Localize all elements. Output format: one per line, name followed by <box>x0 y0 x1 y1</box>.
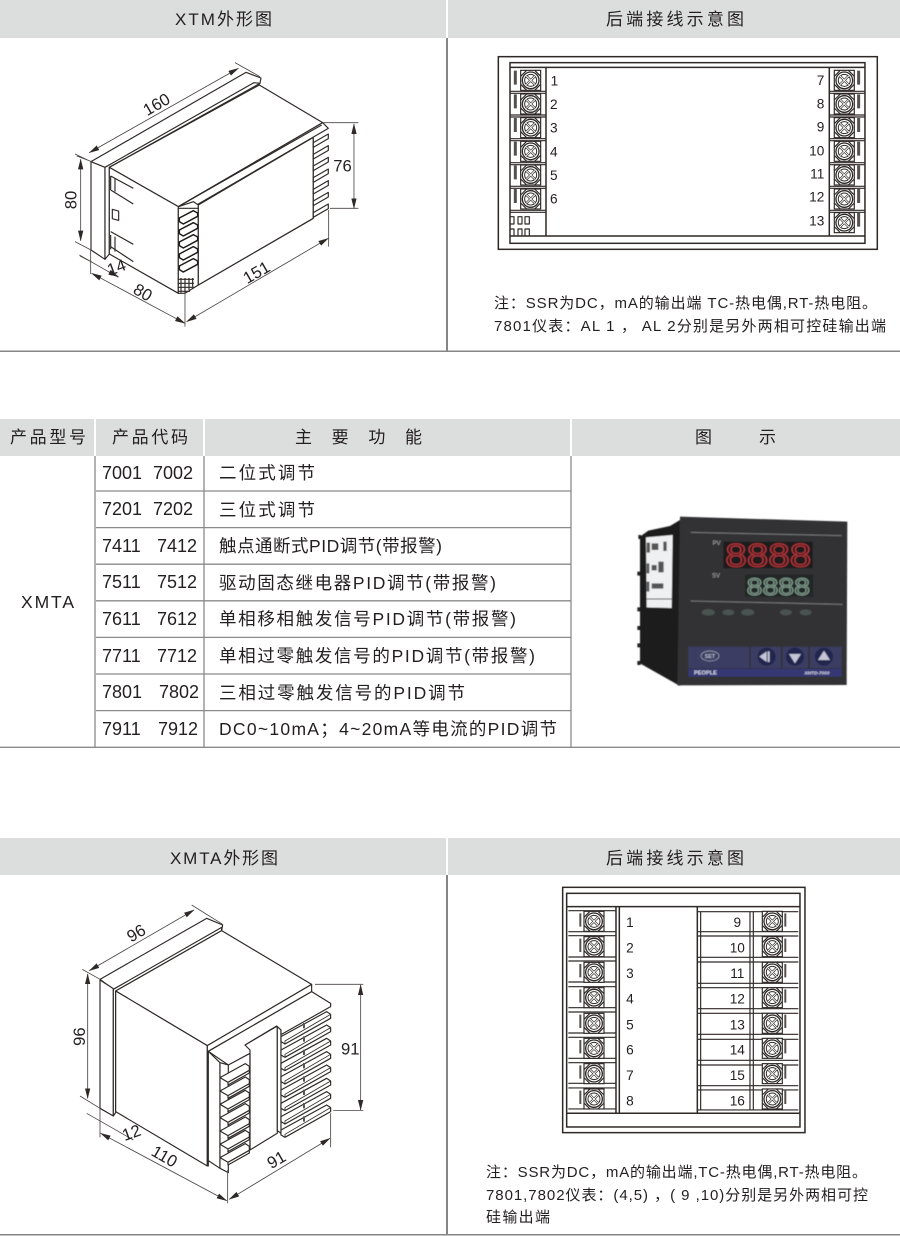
header bar: XMTA outline: XMTA外形图 <box>170 849 278 868</box>
table: product models <box>0 419 900 747</box>
product codes: 7801 <box>102 682 142 702</box>
product codes: 7002 <box>153 463 193 483</box>
functions: 驱动固态继电器PID调节(带报警) <box>219 573 496 593</box>
terminal numbers: 2 <box>550 97 558 112</box>
table header: 图 示 <box>695 428 776 447</box>
product codes: 7802 <box>159 682 199 702</box>
product codes: 7001 <box>102 463 142 483</box>
product codes: 7411 <box>102 536 141 556</box>
terminal numbers: 12 <box>809 190 824 205</box>
note: XTM wiring: 7801仪表：AL 1 ， AL 2分别是另外两相可控硅输出端 <box>494 318 886 335</box>
terminal numbers: 10 <box>809 143 825 158</box>
terminal numbers: 14 <box>730 1043 745 1058</box>
product codes: 7512 <box>157 572 197 592</box>
terminal numbers: 11 <box>810 166 824 181</box>
photo: XMTA controller: SET <box>705 654 716 660</box>
functions <box>219 463 557 739</box>
right terminal block <box>829 70 865 233</box>
functions: 单相移相触发信号PID调节(带报警) <box>219 609 516 629</box>
product codes: 7611 <box>102 609 141 629</box>
functions: 二位式调节 <box>219 463 315 483</box>
diagram: XTM rear terminals <box>498 57 877 249</box>
note: XMTA wiring <box>486 1164 868 1226</box>
note: XTM wiring <box>494 295 886 335</box>
photo: XMTA controller: 8888 <box>747 574 810 601</box>
product codes <box>102 463 199 739</box>
product codes: 7911 <box>102 719 141 739</box>
terminal numbers: 3 <box>550 120 558 135</box>
table header <box>0 419 900 456</box>
product codes: 7511 <box>102 572 141 592</box>
functions: 触点通断式PID调节(带报警) <box>219 536 442 556</box>
table: product models: XMTA <box>21 592 74 612</box>
header bar: XTM outline <box>0 0 446 38</box>
diagram: XMTA isometric outline with dimensions: 96 <box>70 1027 89 1046</box>
note: XMTA wiring: 注：SSR为DC，mA的输出端,TC-热电偶,RT-热电阻。 <box>486 1164 867 1181</box>
diagram: XTM isometric outline with dimensions <box>62 63 358 327</box>
table header: 产品型号 <box>10 428 86 447</box>
terminal numbers: 13 <box>730 1017 745 1032</box>
terminal numbers: 15 <box>730 1068 745 1083</box>
terminal numbers: 11 <box>730 966 744 981</box>
photo: XMTA controller: 8888 <box>725 537 811 573</box>
photo: XMTA controller: XMTD-7000 <box>803 670 830 675</box>
functions: DC0~10mA；4~20mA等电流的PID调节 <box>219 719 557 739</box>
terminal numbers: 9 <box>817 120 824 135</box>
product codes: 7712 <box>157 646 197 666</box>
diagram: XTM isometric outline with dimensions: 160 <box>140 89 173 120</box>
terminal numbers: 1 <box>551 74 558 89</box>
terminal numbers: 6 <box>626 1043 634 1058</box>
terminal numbers: 4 <box>626 992 634 1007</box>
diagram: XMTA isometric outline with dimensions: 12 <box>119 1121 143 1145</box>
terminal numbers: 8 <box>626 1093 634 1108</box>
note: XMTA wiring: 硅输出端 <box>486 1209 550 1226</box>
diagram: XTM isometric outline with dimensions: 76 <box>333 157 352 176</box>
table header: 主 要 功 能 <box>295 428 422 447</box>
terminal numbers: 12 <box>730 992 745 1007</box>
terminal numbers: 5 <box>550 168 558 183</box>
diagram: XTM isometric outline with dimensions: 14 <box>104 255 128 280</box>
terminal numbers: 8 <box>817 96 824 111</box>
terminal numbers: 10 <box>730 941 745 956</box>
note: XMTA wiring: 7801,7802仪表：(4,5) ，( 9 ,10)分别是另外两相可控 <box>486 1187 868 1204</box>
table header: 产品代码 <box>112 428 188 447</box>
photo: XMTA controller: PV <box>713 541 721 547</box>
product codes: 7612 <box>157 609 197 629</box>
header bar: XMTA rear wiring diagram: 后端接线示意图 <box>606 849 744 868</box>
photo: XMTA controller: PEOPLE <box>694 671 717 677</box>
functions: 三相过零触发信号的PID调节 <box>219 683 465 703</box>
terminal numbers: 1 <box>626 915 634 930</box>
diagram: XMTA rear terminals <box>563 887 805 1133</box>
diagram: XTM isometric outline with dimensions: 80 <box>62 191 81 209</box>
functions: 三位式调节 <box>219 500 315 520</box>
note: XTM wiring: 注：SSR为DC，mA的输出端 TC-热电偶,RT-热电阻。 <box>494 295 877 312</box>
photo: XMTA controller <box>637 517 847 686</box>
terminal numbers: 6 <box>550 192 558 207</box>
terminal numbers: 13 <box>809 213 824 228</box>
diagram: XMTA isometric outline with dimensions: 96 <box>123 920 149 946</box>
right terminal block <box>697 911 798 1110</box>
terminal numbers: 4 <box>550 144 558 159</box>
product codes: 7201 <box>102 499 142 519</box>
diagram: XMTA isometric outline with dimensions: 91 <box>264 1147 289 1173</box>
terminal numbers: 2 <box>626 941 634 956</box>
header bar: XTM outline: XTM外形图 <box>175 10 272 29</box>
photo: XMTA controller: SV <box>712 573 720 579</box>
terminal numbers: 9 <box>734 915 741 930</box>
product codes: 7412 <box>157 536 197 556</box>
header bar: rear wiring diagram: 后端接线示意图 <box>606 10 744 29</box>
terminal numbers: 3 <box>626 966 634 981</box>
diagram: XTM isometric outline with dimensions: 80 <box>130 280 156 305</box>
terminal numbers: 7 <box>626 1068 634 1083</box>
product codes: 7912 <box>158 719 198 739</box>
left terminal block <box>510 70 546 236</box>
header bar: rear wiring diagram <box>448 0 900 38</box>
terminal numbers <box>550 73 825 228</box>
product codes: 7711 <box>102 646 141 666</box>
header bar: XMTA rear wiring diagram <box>448 838 900 875</box>
diagram: XTM isometric outline with dimensions: 151 <box>240 257 273 288</box>
terminal numbers <box>626 915 745 1108</box>
diagram: XMTA isometric outline with dimensions <box>70 905 363 1203</box>
left terminal block <box>568 911 616 1109</box>
terminal numbers: 7 <box>817 73 824 88</box>
diagram: XMTA isometric outline with dimensions: 110 <box>148 1142 181 1171</box>
header bar: XMTA outline <box>0 838 446 875</box>
terminal numbers: 16 <box>730 1093 745 1108</box>
functions: 单相过零触发信号的PID调节(带报警) <box>219 646 535 666</box>
terminal numbers: 5 <box>626 1017 634 1032</box>
diagram: XMTA isometric outline with dimensions: 91 <box>341 1039 360 1058</box>
product codes: 7202 <box>153 499 193 519</box>
